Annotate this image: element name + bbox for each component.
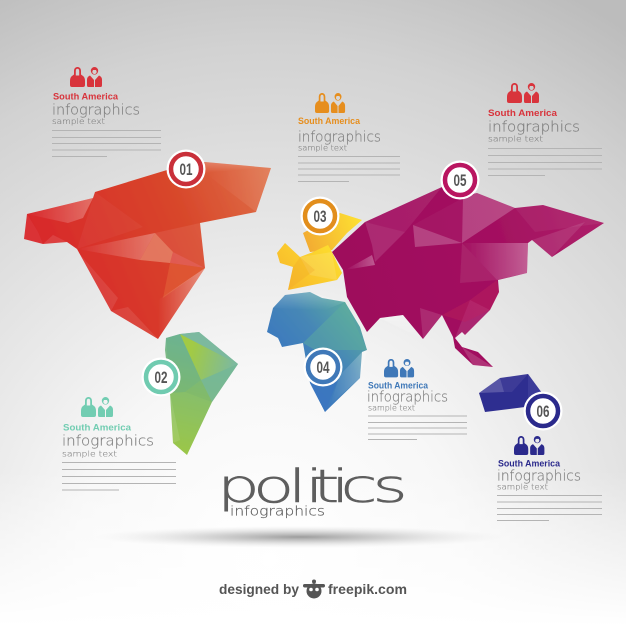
badge 03	[300, 196, 340, 236]
icon: people blue	[384, 359, 414, 377]
continent: yellow Europe	[277, 213, 362, 290]
icon: people navy	[514, 436, 544, 455]
text block 01: South America	[53, 92, 119, 102]
subtitle: infographics: infographics	[230, 504, 325, 520]
text block 02: infographics	[62, 434, 154, 450]
badge 04	[304, 348, 342, 386]
title: politics: politics	[217, 460, 408, 513]
text block 05: sample text	[488, 134, 543, 144]
text block 06	[497, 436, 602, 520]
credit: freepik.com: freepik.com	[328, 581, 407, 597]
text block 05	[488, 83, 602, 176]
text block 05: South America	[488, 108, 558, 119]
text block 01: sample text	[52, 117, 105, 126]
shadow under title	[95, 526, 505, 548]
badge 03: 03	[314, 207, 326, 226]
text block 01: infographics	[52, 102, 140, 118]
text block 05: infographics	[488, 120, 580, 136]
text block 04: sample text	[368, 404, 415, 412]
badge 06	[524, 392, 562, 430]
icon: people orange	[315, 93, 345, 113]
icon: freepik logo	[303, 580, 325, 598]
text block 02: South America	[63, 422, 132, 434]
text block 01	[52, 67, 161, 156]
text block 04: South America	[368, 380, 429, 392]
text block 03: South America	[298, 116, 361, 127]
text block 03: infographics	[298, 130, 381, 146]
text block 02: sample text	[62, 450, 117, 458]
continent: red North America	[24, 162, 271, 339]
badge 02	[142, 358, 180, 396]
badge 05: 05	[454, 171, 466, 190]
text block 02	[62, 397, 176, 490]
text block 06: sample text	[497, 482, 548, 492]
icon: people red	[70, 67, 102, 87]
text block 04	[367, 359, 467, 440]
text block 06: infographics	[497, 468, 581, 484]
badge 06: 06	[536, 402, 550, 421]
badge 02: 02	[154, 368, 168, 387]
text block 04: infographics	[367, 390, 448, 406]
badge 05	[440, 160, 480, 200]
continent: green South America	[165, 332, 238, 455]
badge 04: 04	[316, 358, 330, 377]
text block 03: sample text	[298, 144, 347, 152]
icon: people crimson	[507, 83, 539, 103]
continent: blue Africa	[267, 292, 367, 412]
badge 01: 01	[180, 160, 192, 179]
credit: designed by: designed by	[219, 581, 299, 597]
text block 03	[298, 93, 400, 182]
continent: magenta Asia	[332, 187, 604, 367]
badge 01	[166, 150, 206, 188]
continent: navy Australia	[479, 374, 542, 412]
icon: people teal	[81, 397, 113, 417]
text block 06: South America	[498, 458, 561, 470]
